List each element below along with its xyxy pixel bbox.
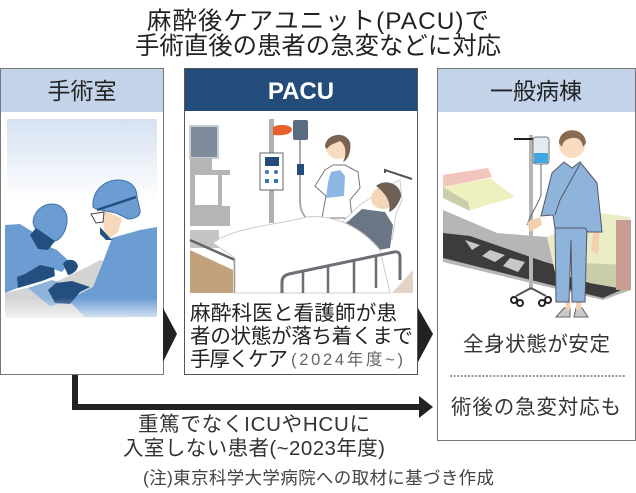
general ward header: 一般病棟 [490,78,582,104]
bed blanket and patient [190,170,413,293]
illustration: patient with IV stand [443,130,631,317]
patient [527,130,602,317]
title: 手術直後の患者の急変などに対応 [135,33,501,60]
PACU description [190,302,413,371]
illustration: surgeons [5,119,159,326]
arrow: bypass to general ward [75,374,433,418]
panel: general ward [438,68,636,440]
bypass label: 入室しない患者(~2023年度) [123,437,385,460]
nurse [315,135,360,218]
panel: operating room [0,68,164,374]
chevron arrow 1 [163,308,177,362]
PACU description: 麻酔科医と看護師が患 [190,302,397,325]
source note: (注)東京科学大学病院への取材に基づき作成 [143,468,494,488]
title: 麻酔後ケアユニット(PACU)で [147,8,489,35]
PACU header [185,69,417,111]
title [135,8,501,60]
illustration: recovery bed with nurse [190,119,413,293]
PACU header: PACU [268,78,334,105]
general ward header [438,69,635,112]
PACU description: 者の状態が落ち着くまで [190,325,413,348]
status text: 全身状態が安定 [463,333,610,356]
operating room header [1,69,163,112]
chevron arrow 2 [418,308,433,362]
PACU description: 手厚くケア [190,348,288,371]
PACU description: (2024年度~) [291,350,403,369]
operating room header: 手術室 [48,78,116,104]
bypass label [123,413,385,460]
bypass label: 重篤でなくICUやHCUに [138,413,370,436]
acute response text: 術後の急変対応も [451,396,621,419]
panel: PACU [184,68,418,374]
